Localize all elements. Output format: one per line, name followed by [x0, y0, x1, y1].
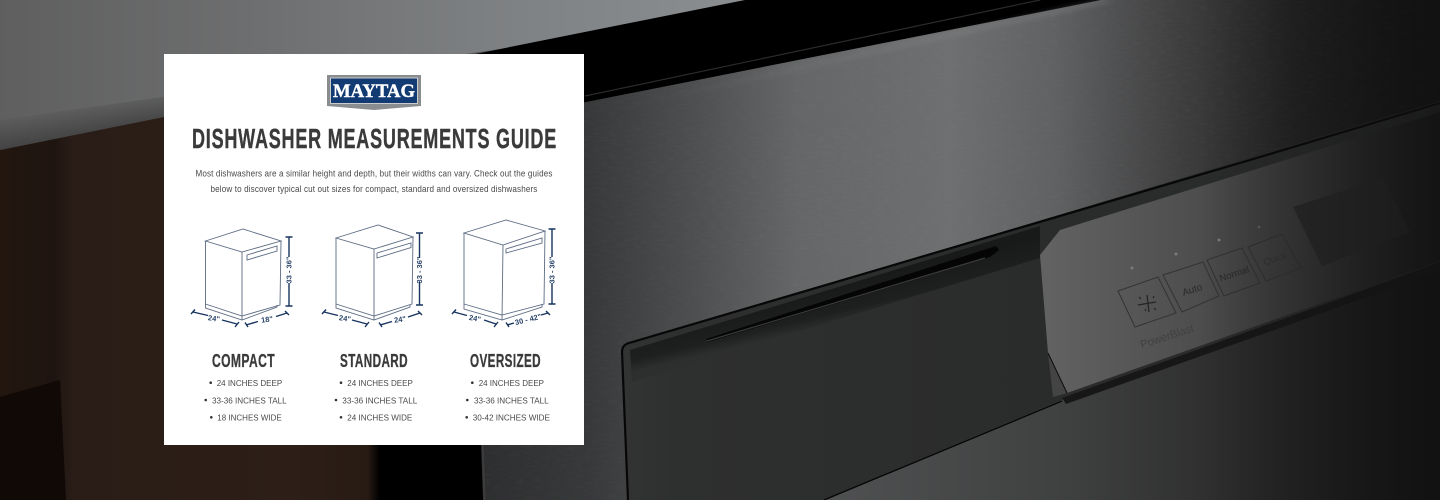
diagram: standard dishwasher: 24": [338, 313, 352, 324]
gray countertop: [0, 0, 745, 150]
panel: measurements guide card: [164, 54, 584, 445]
door handle slot: [706, 246, 999, 342]
lower stainless: [823, 264, 1440, 500]
heading: oversized: OVERSIZED: [470, 351, 541, 371]
column: oversized: [465, 351, 550, 423]
control panel: [1040, 112, 1440, 404]
button labels: Normal: [1218, 264, 1251, 284]
stainless front: [470, 0, 1440, 500]
column: compact: 18 INCHES WIDE: [217, 413, 282, 423]
diagram: compact dishwasher: 24": [207, 313, 221, 324]
powerblast icon: [1138, 295, 1156, 312]
diagram: compact dishwasher: 18": [261, 314, 274, 325]
diagram: compact dishwasher: [191, 229, 294, 327]
column: oversized: 24 INCHES DEEP: [479, 378, 544, 388]
column: standard: 33-36 INCHES TALL: [342, 395, 417, 405]
diagram: compact dishwasher: 33 - 36": [284, 256, 294, 283]
intro text: [196, 168, 553, 194]
column: compact: 33-36 INCHES TALL: [212, 395, 287, 405]
button labels: [1139, 250, 1289, 351]
column: oversized: 33-36 INCHES TALL: [474, 395, 549, 405]
control buttons: [1118, 234, 1301, 327]
column: standard: 24 INCHES WIDE: [347, 413, 412, 423]
diagram: oversized dishwasher: 30 - 42": [514, 312, 543, 327]
intro text: Most dishwashers are a similar height and depth, but their widths can vary. Check out the guides: [196, 168, 553, 178]
intro text: below to discover typical cut out sizes for compact, standard and oversized dishwashers: [210, 184, 538, 194]
icon: Maytag logo: [327, 75, 421, 110]
diagram: oversized dishwasher: [452, 220, 556, 327]
button labels: Quick: [1262, 250, 1289, 268]
diagram: standard dishwasher: 24": [394, 314, 407, 325]
icon: Maytag logo: MAYTAG: [333, 81, 415, 102]
wood cabinet: [0, 100, 490, 500]
column: standard: [335, 351, 417, 423]
diagram: oversized dishwasher: 24": [468, 313, 482, 324]
indicator lights: [1130, 226, 1260, 270]
diagram: oversized dishwasher: 33 - 36": [548, 256, 556, 283]
display window: [1293, 178, 1410, 266]
title: DISHWASHER MEASUREMENTS GUIDE: [192, 123, 557, 154]
column: compact: 24 INCHES DEEP: [217, 378, 282, 388]
column: compact: [204, 351, 287, 423]
heading: compact: COMPACT: [212, 351, 275, 371]
diagram: standard dishwasher: 33 - 36": [415, 256, 424, 283]
button labels: PowerBlast: [1139, 323, 1196, 351]
button labels: Auto: [1181, 282, 1204, 299]
diagram: standard dishwasher: [322, 225, 424, 327]
column: oversized: 30-42 INCHES WIDE: [473, 413, 550, 423]
dishwasher door panel: [622, 101, 1440, 500]
heading: standard: STANDARD: [340, 351, 408, 371]
column: standard: 24 INCHES DEEP: [347, 378, 413, 388]
